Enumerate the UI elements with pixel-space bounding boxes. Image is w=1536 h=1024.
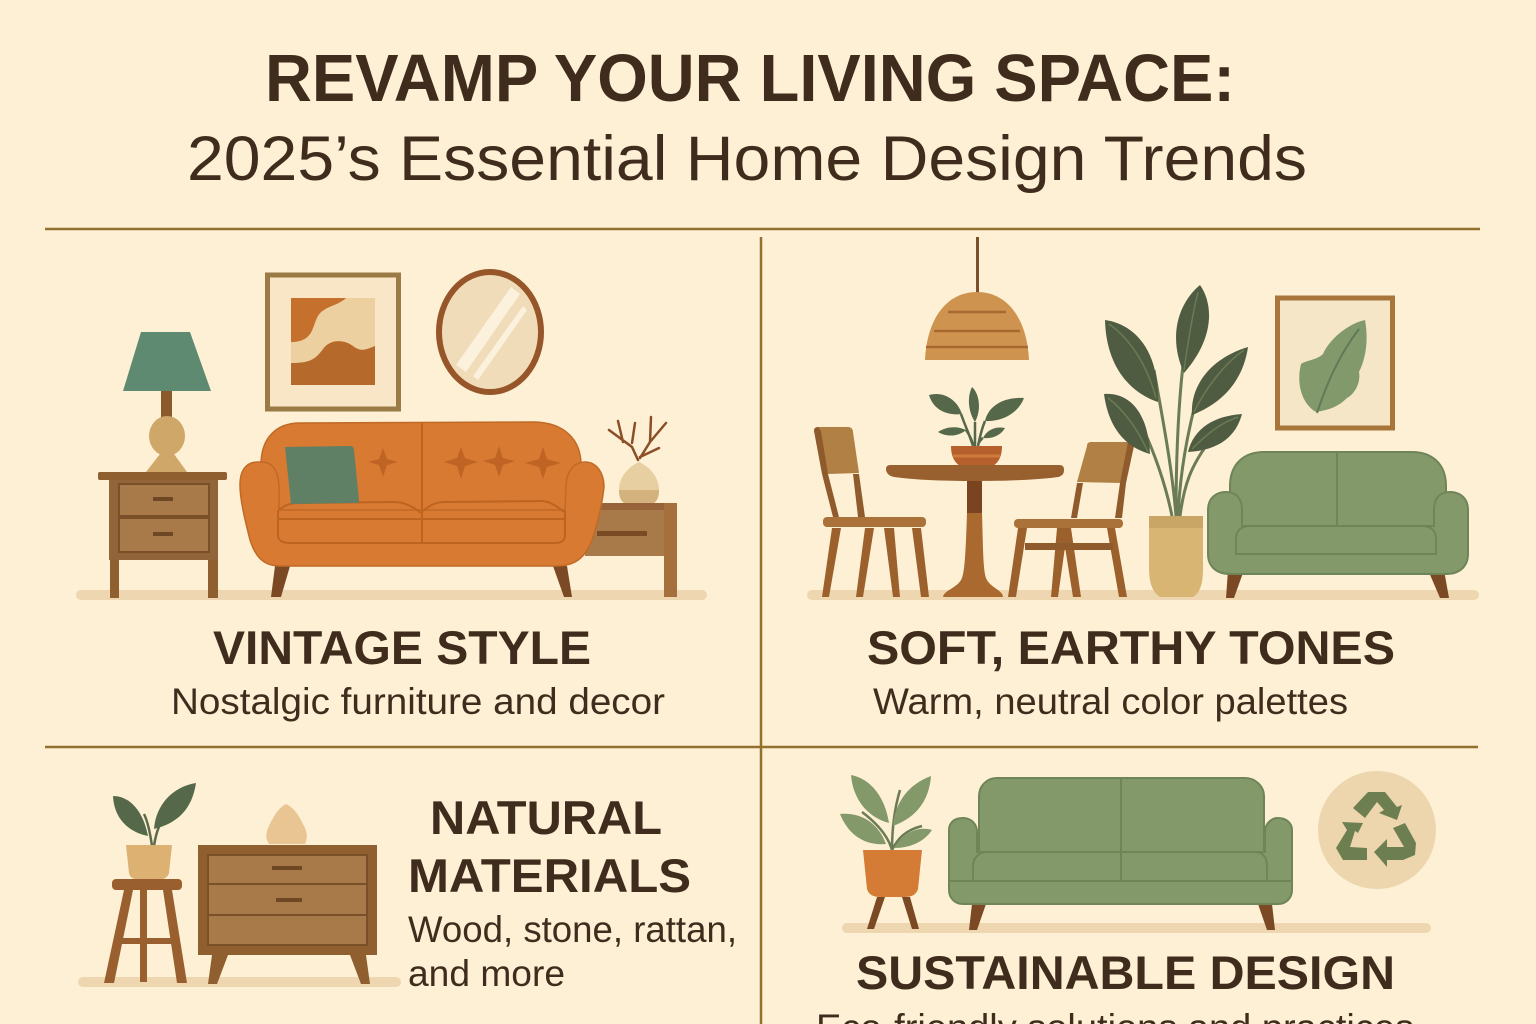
icon: table lamp xyxy=(123,332,211,472)
icon: tall plant xyxy=(1104,285,1248,597)
icon: nightstand xyxy=(98,472,227,598)
heading: natural materials xyxy=(408,791,691,902)
icon: right chair xyxy=(1008,442,1134,597)
icon: wooden dresser xyxy=(198,845,377,984)
panel: soft earthy tones xyxy=(807,237,1479,722)
heading: soft earthy tones: SOFT, EARTHY TONES xyxy=(867,621,1395,674)
icon: framed leaf art xyxy=(1278,298,1392,428)
icon: dining table with plant xyxy=(886,387,1064,597)
icon: oval mirror xyxy=(439,272,541,392)
floor xyxy=(807,590,1479,600)
icon: green sofa xyxy=(949,778,1292,930)
icon: framed abstract art xyxy=(268,275,398,409)
icon: potted plant xyxy=(840,775,932,929)
icon: left chair xyxy=(814,427,929,597)
panel: sustainable design xyxy=(816,771,1436,1024)
icon: side table with vase xyxy=(585,417,677,597)
heading: vintage style: VINTAGE STYLE xyxy=(213,621,591,674)
icon: recycling badge xyxy=(1318,771,1436,889)
heading: natural materials: NATURAL xyxy=(430,791,662,844)
text: natural materials description xyxy=(408,909,737,994)
floor xyxy=(76,590,707,600)
icon: orange sofa xyxy=(240,422,604,597)
text: natural materials description: Wood, stone, rattan, xyxy=(408,909,737,950)
heading: sustainable design: SUSTAINABLE DESIGN xyxy=(856,946,1395,999)
icon: pendant lamp xyxy=(925,237,1029,360)
panel: vintage style xyxy=(76,272,707,722)
title: REVAMP YOUR LIVING SPACE: xyxy=(265,41,1235,116)
panel: natural materials xyxy=(78,783,737,994)
icon: vase xyxy=(266,804,307,844)
text: earthy tones description: Warm, neutral color palettes xyxy=(873,681,1348,722)
icon: green sofa xyxy=(1208,452,1468,598)
heading: natural materials: MATERIALS xyxy=(408,849,691,902)
floor xyxy=(78,977,401,987)
title xyxy=(187,41,1307,194)
floor xyxy=(842,923,1431,933)
icon: plant on stool xyxy=(104,783,196,983)
text: vintage style description: Nostalgic furniture and decor xyxy=(171,681,665,722)
text: natural materials description: and more xyxy=(408,953,565,994)
title: 2025’s Essential Home Design Trends xyxy=(187,124,1307,194)
